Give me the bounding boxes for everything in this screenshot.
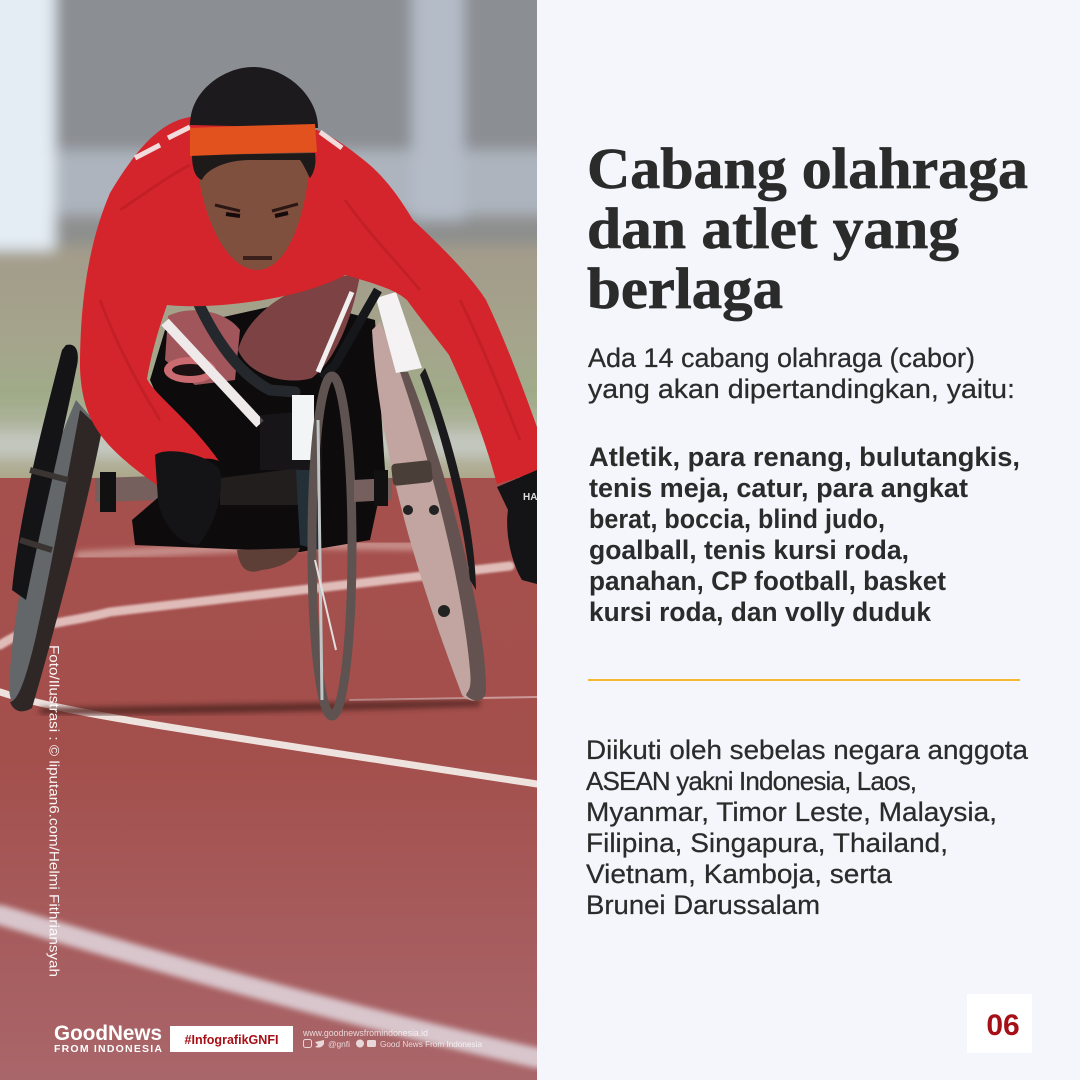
list of sports: [589, 442, 1020, 627]
far crossbar: [354, 478, 392, 502]
body black lower: [132, 300, 385, 552]
intro text: yang akan dipertandingkan, yaitu:: [588, 374, 1015, 404]
footer: hashtag box: [170, 1026, 293, 1052]
list of sports: panahan, CP football, basket: [589, 566, 946, 596]
shadow under chair: [40, 700, 480, 715]
white fork tube: [376, 292, 422, 373]
cushion: [238, 275, 360, 381]
left wheel: [9, 345, 102, 711]
footer: hashtag box: #InfografikGNFI: [184, 1033, 278, 1047]
participating countries text: Myanmar, Timor Leste, Malaysia,: [586, 797, 997, 827]
photo credit: Foto/Ilustrasi : © liputan6.com/Helmi Fithriansyah: [46, 645, 62, 977]
page number: 06: [986, 1009, 1020, 1042]
footer: website and social handles: [302, 1028, 482, 1049]
title: dan atlet yang: [587, 196, 959, 261]
intro text: Ada 14 cabang olahraga (cabor): [588, 343, 975, 373]
title: [587, 136, 1028, 321]
axle bar: [95, 476, 160, 502]
right disc wheel: [372, 322, 486, 701]
panel: photo of wheelchair racer: [0, 0, 560, 1080]
page number: [967, 994, 1032, 1053]
arms and torso: [80, 117, 537, 485]
front wheel: [312, 376, 352, 716]
participating countries text: Vietnam, Kamboja, serta: [586, 859, 893, 889]
feet: [237, 548, 300, 572]
list of sports: tenis meja, catur, para angkat: [589, 473, 968, 503]
footer: website and social handles: @gnfi: [328, 1039, 350, 1049]
footer: GoodNews logo: [54, 1022, 162, 1055]
footer: GoodNews logo: GoodNews: [54, 1022, 162, 1045]
footer: GoodNews logo: FROM INDONESIA: [54, 1043, 162, 1055]
gloves: [155, 451, 221, 545]
title: Cabang olahraga: [587, 136, 1028, 201]
list of sports: berat, boccia, blind judo,: [589, 504, 885, 534]
list of sports: kursi roda, dan volly duduk: [589, 597, 932, 627]
panel: photo of wheelchair racer: HA: [523, 492, 537, 503]
title: berlaga: [587, 256, 783, 321]
participating countries text: [586, 735, 1029, 920]
participating countries text: Diikuti oleh sebelas negara anggota: [586, 735, 1029, 765]
participating countries text: Brunei Darussalam: [586, 890, 820, 920]
track lines: [0, 544, 537, 1058]
head: [190, 67, 318, 270]
list of sports: goalball, tenis kursi roda,: [589, 535, 909, 565]
footer: website and social handles: www.goodnewsfromindonesia.id: [302, 1028, 428, 1038]
panel: right text background: [537, 0, 1080, 1080]
participating countries text: ASEAN yakni Indonesia, Laos,: [586, 766, 917, 796]
participating countries text: Filipina, Singapura, Thailand,: [586, 828, 948, 858]
footer: website and social handles: Good News From Indonesia: [380, 1039, 482, 1049]
intro text: [588, 343, 1015, 404]
hand rail & frame: [165, 322, 260, 424]
list of sports: Atletik, para renang, bulutangkis,: [589, 442, 1020, 472]
